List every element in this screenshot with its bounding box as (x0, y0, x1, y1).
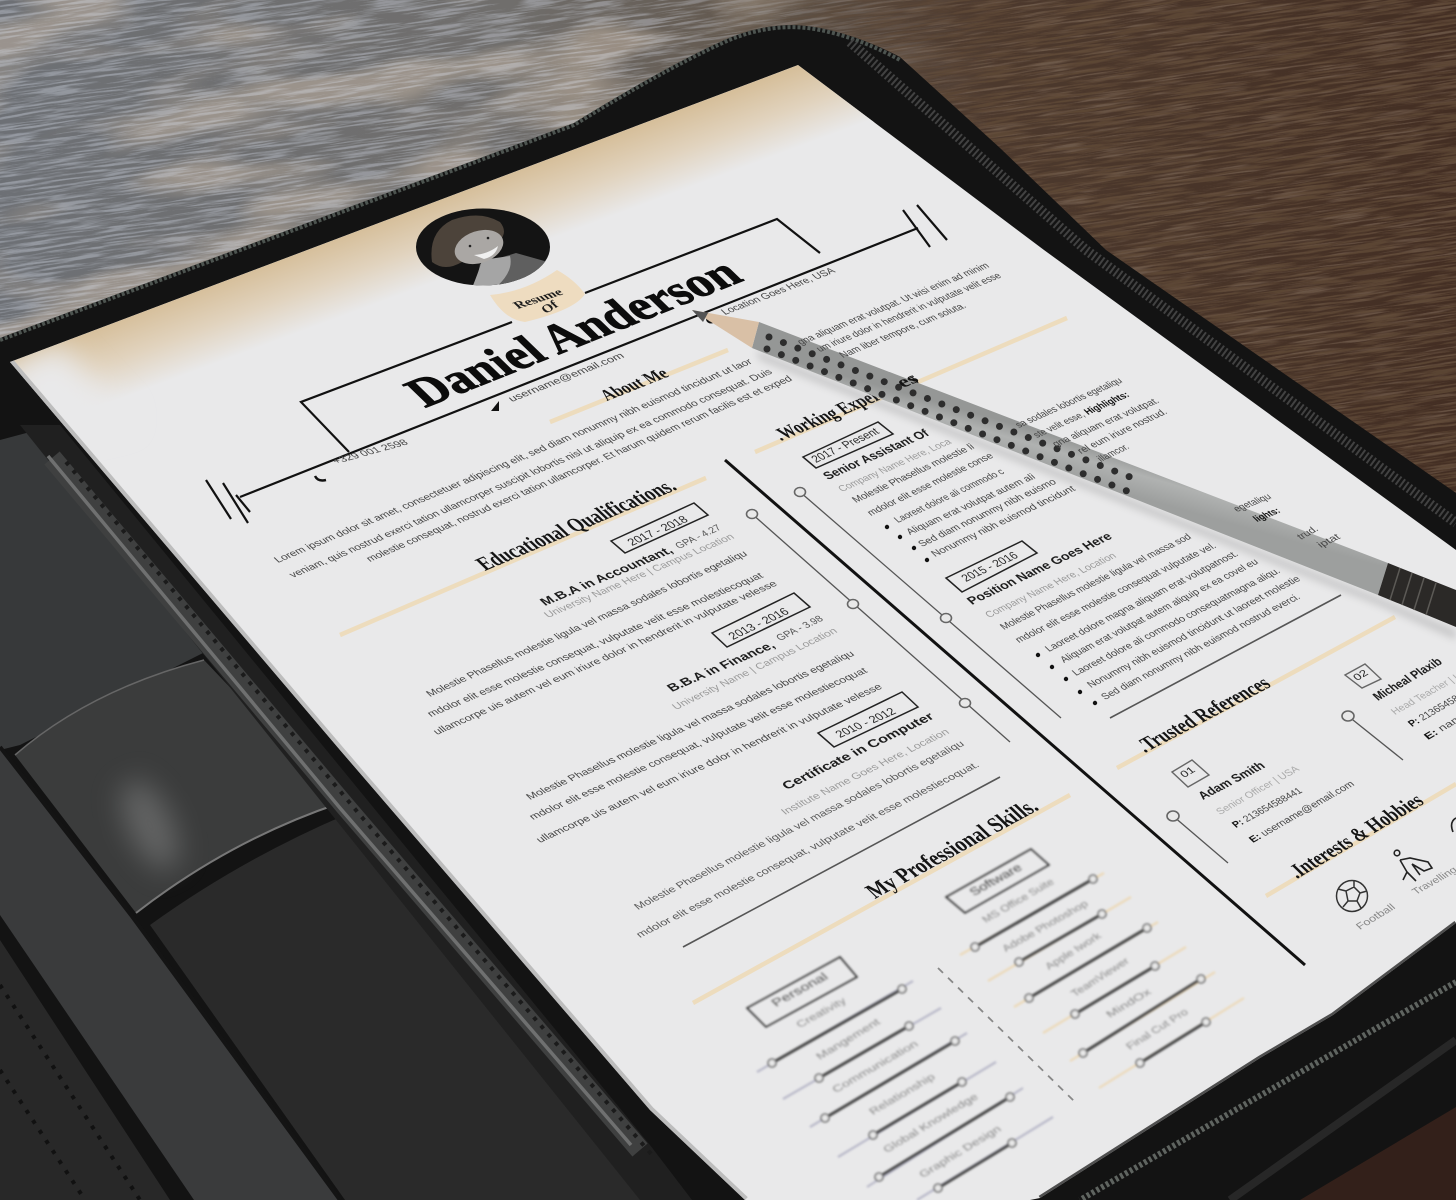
software skills: Final Cut Pro (1123, 1006, 1191, 1052)
text fragments visible over the pencil: ste velit esse, Highlights: (1030, 389, 1132, 440)
text fragments visible over the pencil (794, 260, 1343, 550)
education entry 1: GPA - 4.27 (672, 522, 724, 551)
label: travelling: Travelling (1409, 864, 1456, 897)
education entry 1: M.B.A in Accountant, (537, 544, 676, 608)
personal skills (747, 957, 1053, 1200)
section: trusted references: .Trusted References (1131, 672, 1276, 757)
personal skills: Global Knowledge (880, 1091, 981, 1155)
software skills: Apple Iwork (1042, 930, 1105, 972)
software skills: Adobe Photoshop (999, 898, 1091, 954)
reference 1: P: 213654588441 (1229, 785, 1305, 830)
personal skills: Graphic Design (916, 1123, 1004, 1180)
header frame (206, 205, 947, 523)
section: working experiences: .Working Experiences (769, 371, 924, 445)
education entry 2: 2013 - 2016 (725, 605, 792, 642)
job 2: 2015 - 2016 (958, 549, 1021, 584)
text fragments visible over the pencil: trud. (1294, 523, 1321, 542)
education entry 3: 2010 - 2012 (832, 705, 899, 740)
education entry 2: B.B.A in Finance, (664, 639, 778, 694)
reference 2: 02 (1350, 667, 1371, 683)
education entry 2: University Name | Campus Location (669, 625, 840, 712)
reference 2 (1342, 655, 1456, 760)
work timeline (794, 488, 1061, 718)
personal skills: Relationship (866, 1071, 938, 1117)
reference 1: Senior Officer | USA (1213, 763, 1302, 817)
job 2: Position Name Goes Here (964, 530, 1115, 607)
reference 1 (1167, 759, 1357, 863)
left strap (0, 747, 340, 1200)
label: football: Football (1353, 901, 1398, 932)
job 1: Company Name Here, Loca (835, 436, 954, 494)
text: um iriure dolor in hendrerit in vulputate velit esse (813, 270, 1004, 354)
lower inner panel (150, 815, 650, 1200)
job 2: Company Name Here, Location (982, 550, 1119, 620)
center divider (725, 460, 1305, 965)
text fragments visible over the pencil: egetaliqu (1230, 491, 1274, 514)
text fragments visible over the pencil: Nam liber tempore, cum soluta. (836, 300, 969, 360)
inner binding strip (20, 425, 692, 1200)
job 1: Aliquam erat volutpat autem ali (903, 471, 1038, 537)
education entry 1: 2017 - 2018 (624, 513, 691, 548)
text: Educational Qualifications. (470, 475, 682, 575)
job 1: Senior Assistant Of (820, 427, 933, 482)
contact details: +329 001 2598 (329, 437, 411, 466)
leather flap (15, 660, 340, 913)
education entry 3: Certificate in Computer (779, 710, 938, 792)
personal skills: Creativity (793, 995, 849, 1030)
section: about me (271, 350, 795, 580)
text fragments visible over the pencil: sa sodales lobortis egetaliqu (1012, 375, 1125, 430)
text fragments visible over the pencil: illamcor. (1094, 441, 1132, 464)
section: professional skills (693, 795, 1244, 1200)
contact details: Location Goes Here, USA (718, 265, 838, 317)
resume of tag: Resume (511, 287, 567, 311)
pencil (692, 310, 1456, 640)
job 1: Nonummy nibh euismod tincidunt (928, 483, 1078, 559)
section: educational qualifications (340, 475, 1010, 947)
education entry 1 (423, 503, 780, 737)
profile photo (416, 208, 550, 286)
education entry 3: Institute Name Goes Here, Location (778, 726, 952, 817)
job 1 (803, 422, 1078, 562)
text: gna aliquam erat volutpat. Ut wisi enim ad minim (794, 260, 992, 347)
software skills: TeamViewer (1068, 955, 1132, 999)
upper inner pocket (0, 432, 205, 750)
education entry 1: University Name Here | Campus Location (541, 531, 737, 620)
lower right zipper (1080, 982, 1456, 1200)
job 1: mdolor elit esse molestie conse (864, 450, 996, 518)
reference 1: 01 (1177, 764, 1198, 780)
job 1: 2017 - Present (808, 425, 882, 465)
text fragments visible over the pencil: lights: (1250, 505, 1283, 524)
section: about me: About Me (595, 364, 673, 404)
personal skills: Personal (768, 970, 831, 1009)
text: My Professional Skills. (860, 795, 1044, 903)
software skills: MindOx (1103, 986, 1154, 1020)
education entry 3 (631, 692, 1000, 947)
education entry 2 (523, 593, 885, 845)
section: working experiences (755, 318, 1341, 718)
education timeline (746, 510, 1010, 742)
personal skills: Communication (829, 1038, 921, 1095)
resume of tag (490, 270, 585, 322)
job 1: Laoreet dolore ali commodo c (891, 466, 1007, 525)
section: trusted references (1117, 617, 1456, 863)
education entry 2: GPA - 3.98 (773, 613, 826, 643)
job 2 (946, 530, 1341, 718)
contact details (315, 265, 838, 480)
icon: travelling (1394, 850, 1432, 881)
text fragments visible over the pencil: rel eum iriure nostrud. (1074, 406, 1170, 456)
job 1: Sed diam nonummy nibh euismo (915, 476, 1059, 549)
software skills (946, 849, 1244, 1088)
section: interests and hobbies (1266, 784, 1456, 932)
text fragments visible over the pencil: es (891, 369, 924, 391)
skills divider (938, 968, 1075, 1102)
contact details: username@email.com (505, 350, 627, 404)
reference 1: Adam Smith (1195, 759, 1268, 802)
software skills: Software (966, 861, 1025, 898)
software skills: MS Office Suite (979, 876, 1057, 925)
resume of tag: Of (539, 298, 562, 316)
reference 1: E: username@email.com (1246, 778, 1357, 845)
reference 2: Micheal Plaxib (1370, 655, 1445, 703)
text fragments visible over the pencil: iptat (1314, 531, 1343, 550)
text fragments visible over the pencil: gna aliquam erat volutpat. (1049, 395, 1162, 449)
job 1: Molestie Phasellus molestie li (849, 441, 977, 505)
personal skills: Mangement (813, 1016, 883, 1062)
icon: football (1336, 880, 1368, 912)
icon: partial third hobby (1452, 818, 1456, 832)
